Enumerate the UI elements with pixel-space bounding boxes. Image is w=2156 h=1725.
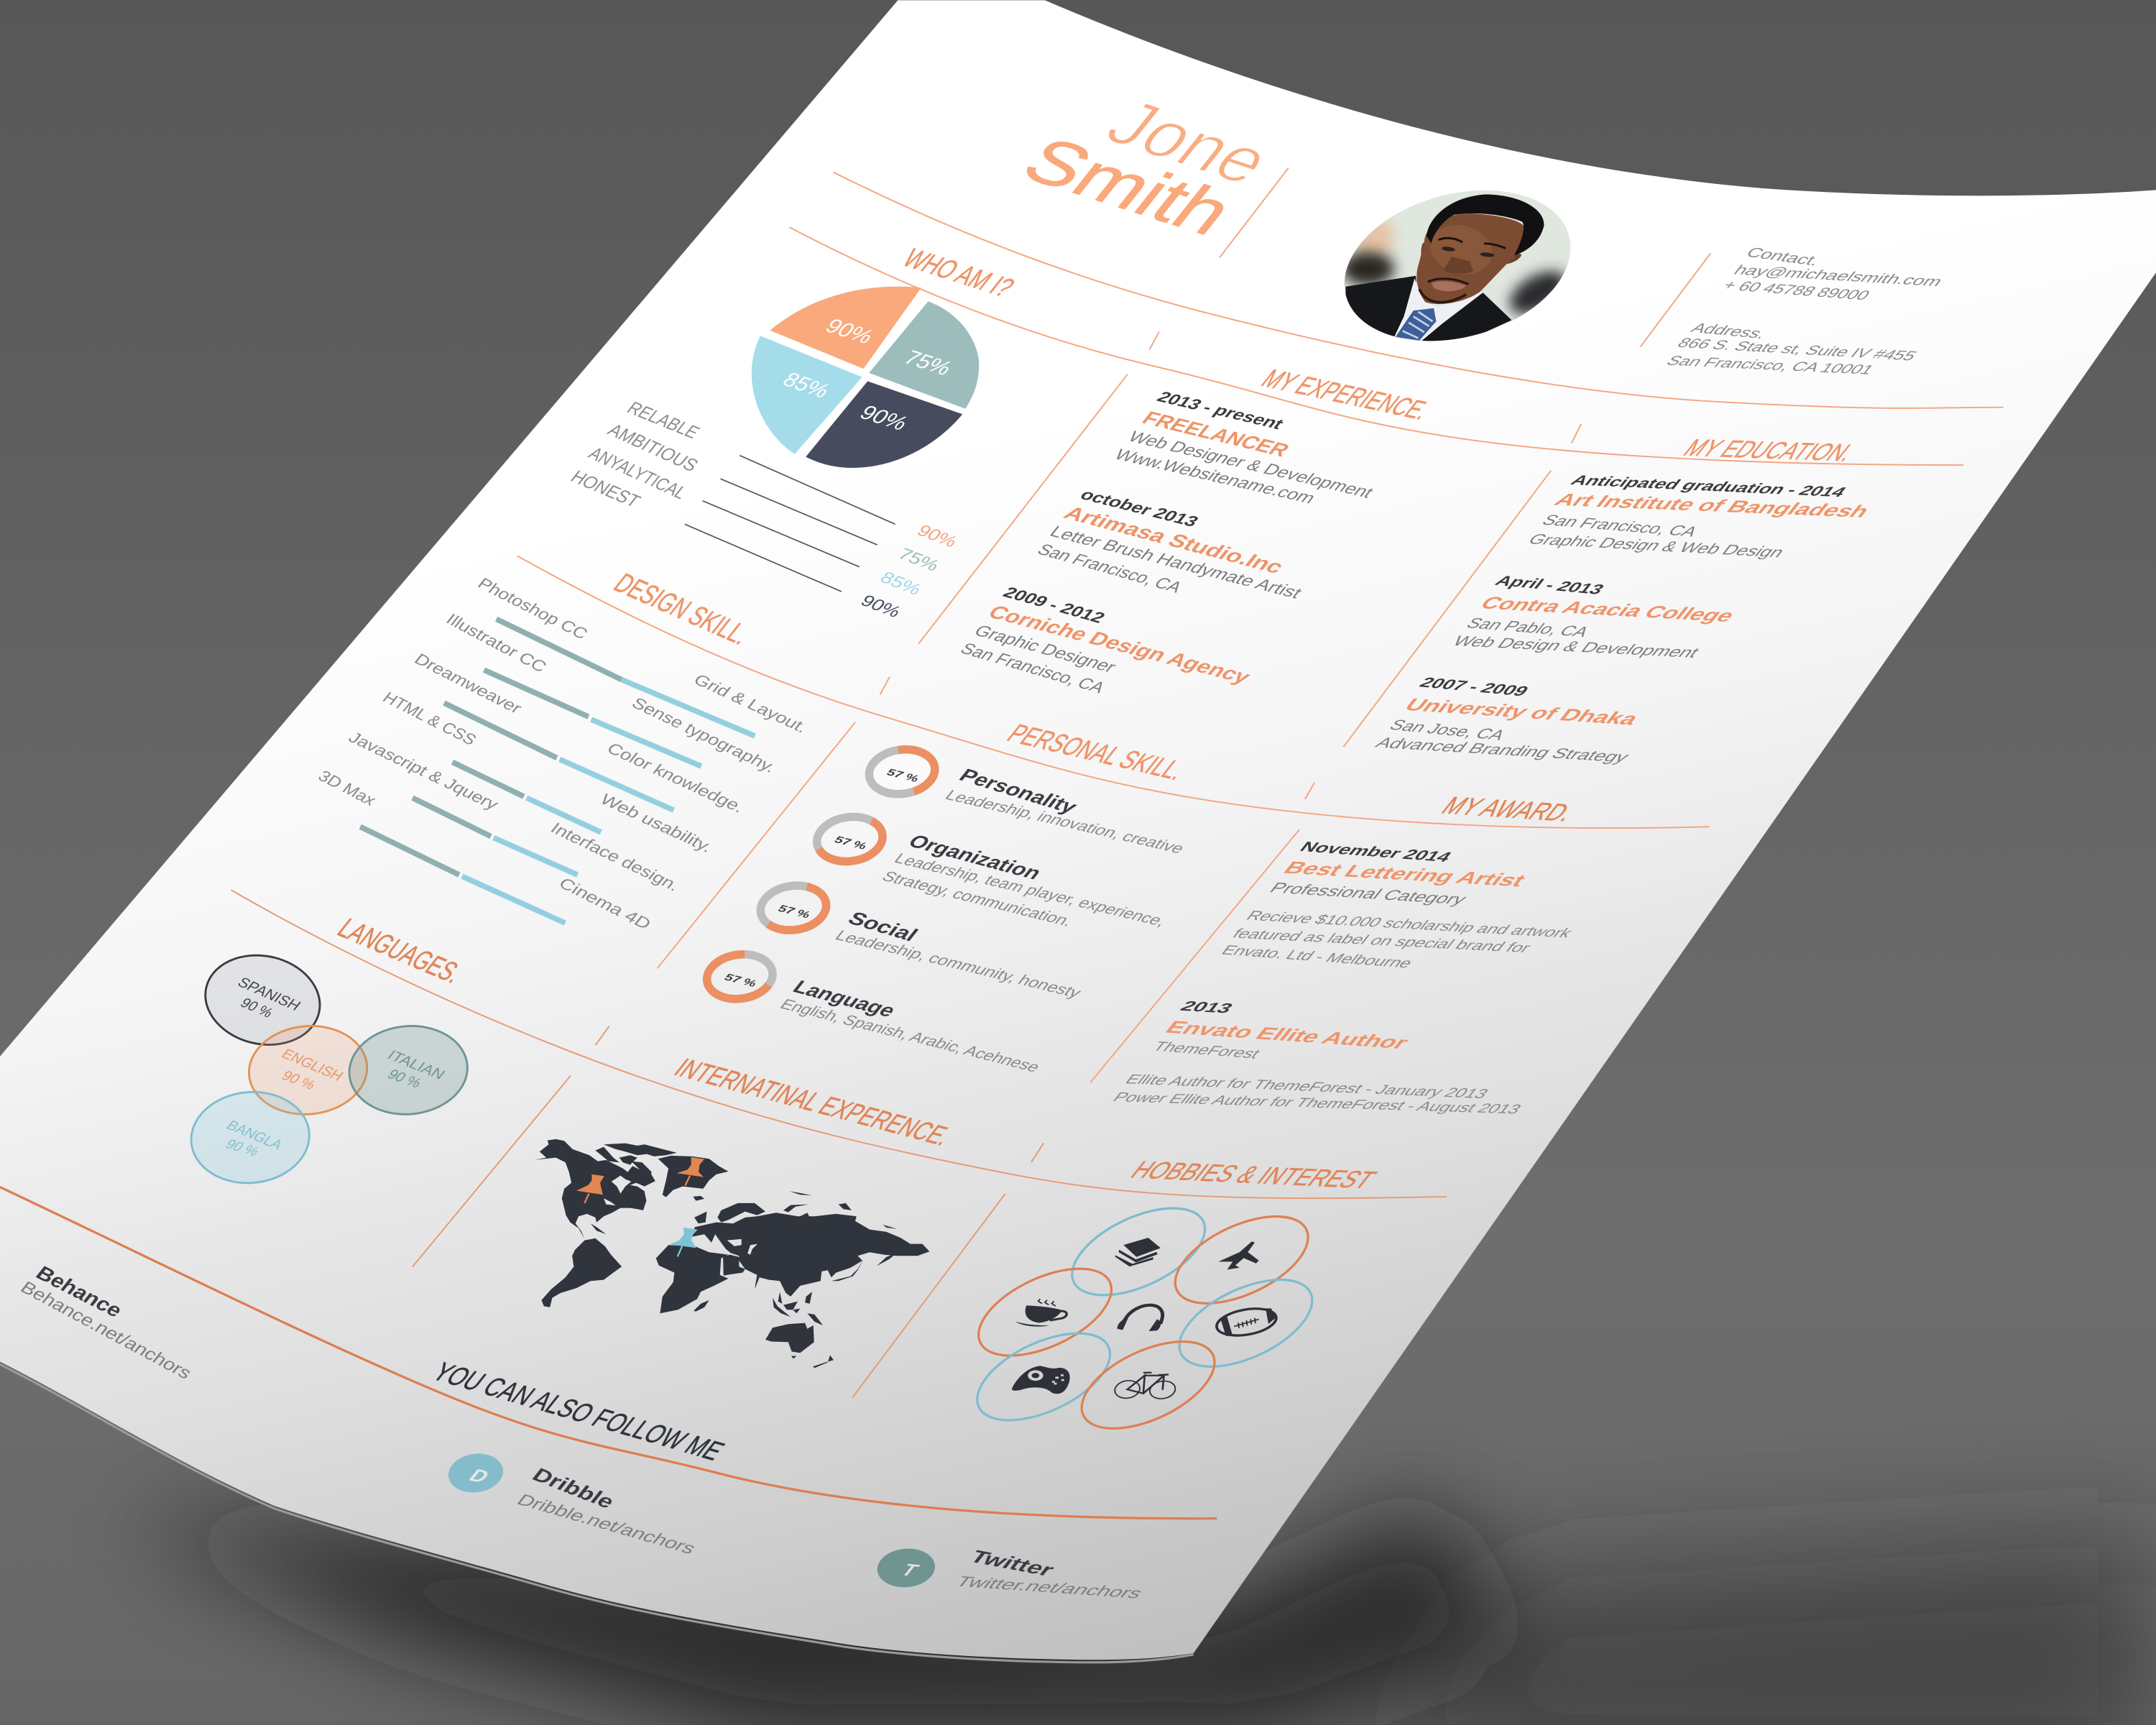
donut: social: 57 % <box>775 903 813 921</box>
panel: personal skill <box>704 719 1192 1075</box>
skill labels left: Dreamweaver <box>410 650 525 717</box>
award list: Professional Category <box>1266 880 1470 908</box>
heading: my experience: MY EXPERIENCE. <box>1255 365 1437 426</box>
behance link: Behance <box>32 1262 126 1322</box>
personal skill text: Organization <box>904 832 1046 883</box>
skill labels left: Javascript & Jquery <box>345 729 502 814</box>
trait list: AMBITIOUS <box>604 420 702 475</box>
trait list: HONEST <box>567 466 645 511</box>
bubble: english: 90 % <box>278 1067 319 1092</box>
panel: award <box>1110 791 1582 1116</box>
award list: Envato. Ltd - Melbourne <box>1218 942 1416 970</box>
personal skill text: Personality <box>954 765 1082 818</box>
school list: San Jose, CA <box>1386 717 1509 743</box>
skill labels right: Color knowledge. <box>603 740 748 816</box>
heading: design skill: DESIGN SKILL. <box>607 568 756 650</box>
heading: my award: MY AWARD. <box>1436 791 1582 827</box>
icon: t badge <box>875 1546 936 1590</box>
job list: october 2013 <box>1076 487 1202 530</box>
icon: airplane <box>1218 1241 1259 1269</box>
heading: my education: MY EDUCATION. <box>1677 434 1862 466</box>
job list: Www.Websitename.com <box>1110 446 1319 507</box>
paper shadow <box>124 1506 2156 1725</box>
heading: who am i: WHO AM I? <box>896 244 1021 303</box>
personal skill text: Language <box>788 978 900 1021</box>
bubble: english: ENGLISH <box>278 1046 347 1084</box>
job list: San Francisco, CA <box>1033 541 1186 597</box>
icon: gamepad <box>1012 1366 1070 1394</box>
trait list: 90% <box>857 592 905 621</box>
heading: personal skill: PERSONAL SKILL. <box>1000 719 1192 786</box>
contact details: Address. <box>1687 320 1771 341</box>
skill labels right: Interface design. <box>547 819 683 895</box>
pie chart: 85% <box>778 368 835 402</box>
icon: football <box>1214 1305 1279 1340</box>
icon: t badge: T <box>896 1561 923 1580</box>
pie chart: 90% <box>821 314 879 348</box>
school list: Art Institute of Bangladesh <box>1550 490 1874 521</box>
award list: Recieve $10.000 scholarship and artwork <box>1243 908 1577 940</box>
paper rim <box>0 1364 1194 1662</box>
heading: hobbies: HOBBIES & INTEREST <box>1125 1156 1382 1193</box>
job list: Web Designer & Development <box>1124 428 1377 502</box>
panel: international experience <box>534 1053 959 1368</box>
donut: organization <box>814 813 885 865</box>
dribbble link: Dribble <box>528 1465 619 1513</box>
icon: bicycle <box>1112 1373 1178 1401</box>
personal skill text: Leadership, team player, experience, <box>891 850 1171 929</box>
school list <box>1372 472 1874 765</box>
donut: social <box>757 881 829 934</box>
job list: 2013 - present <box>1153 389 1287 433</box>
bubble: italian: ITALIAN <box>384 1047 448 1082</box>
skill labels left: HTML & CSS <box>379 689 480 749</box>
personal skill text <box>777 765 1188 1075</box>
heading: international experience: INTERNATINAL EXPERENCE. <box>668 1053 959 1151</box>
skill labels right: Sense typography. <box>628 694 780 776</box>
world map <box>534 1139 929 1368</box>
bubble: bangla: 90 % <box>222 1137 262 1159</box>
award list: Power Ellite Author for ThemeForest - August 2013 <box>1110 1090 1525 1116</box>
school list: Graphic Design & Web Design <box>1524 532 1788 561</box>
contact details: hay@michaelsmith.com <box>1731 262 1947 289</box>
personal skill text: English, Spanish, Arabic, Acehnese <box>777 996 1044 1075</box>
job list: Letter Brush Handymate Artist <box>1046 523 1306 602</box>
behance link: Behance.net/anchors <box>17 1277 195 1383</box>
twitter link <box>875 1546 1146 1601</box>
school list: Contra Acacia College <box>1475 594 1739 626</box>
panel: follow me <box>17 1262 1146 1601</box>
job list: FREELANCER <box>1138 408 1294 461</box>
pie chart: 75% <box>899 346 957 380</box>
award list <box>1110 839 1577 1116</box>
donut: organization: 57 % <box>831 834 870 852</box>
bubble: italian <box>346 1021 471 1119</box>
donut: language: 57 % <box>722 972 760 989</box>
school list: April - 2013 <box>1491 573 1608 598</box>
contact details: 866 S. State st, Suite IV #455 <box>1674 335 1920 363</box>
skill labels right: Cinema 4D <box>555 875 655 933</box>
panel: languages <box>188 913 471 1188</box>
section curve lines <box>0 168 2004 1519</box>
award list: Best Lettering Artist <box>1279 858 1530 891</box>
bubble: spanish: SPANISH <box>234 974 304 1013</box>
icon: books <box>1115 1238 1161 1266</box>
award list: featured as label on special brand for <box>1229 926 1535 955</box>
twitter link: Twitter.net/anchors <box>952 1574 1146 1601</box>
contact details: + 60 45788 89000 <box>1719 277 1874 303</box>
school list: University of Dhaka <box>1400 695 1644 729</box>
pin: north america <box>576 1174 604 1203</box>
award list: ThemeForest <box>1149 1039 1265 1062</box>
title: name: Jone <box>1092 87 1286 198</box>
skill labels right: Grid & Layout. <box>690 671 811 737</box>
personal skill text: Social <box>843 908 922 945</box>
pie chart: 90% <box>855 401 913 434</box>
skill labels left: Photoshop CC <box>474 575 591 643</box>
personal skill text: Leadership, community, honesty <box>831 927 1085 1000</box>
pin: europe <box>669 1228 698 1256</box>
panel: who am i <box>567 244 1021 621</box>
personal skill text: Leadership, innovation, creative <box>941 787 1188 856</box>
donut: personality <box>866 745 938 798</box>
award list: Envato Ellite Author <box>1161 1018 1414 1053</box>
bubble: italian: 90 % <box>384 1066 425 1090</box>
school list: Anticipated graduation - 2014 <box>1567 472 1851 500</box>
bubble: bangla <box>188 1087 313 1188</box>
job list: Graphic Designer <box>970 622 1120 676</box>
skill labels left <box>315 575 591 814</box>
school list: 2007 - 2009 <box>1416 675 1532 699</box>
job list: San Francisco, CA <box>957 640 1109 696</box>
award list: November 2014 <box>1296 839 1456 865</box>
skill labels left: 3D Max <box>315 768 379 809</box>
bubble: spanish <box>197 945 328 1055</box>
contact details: Contact. <box>1743 244 1824 269</box>
school list: Web Design & Development <box>1449 633 1703 661</box>
school list: San Pablo, CA <box>1462 615 1593 640</box>
job list: Corniche Design Agency <box>983 602 1256 688</box>
personal skill text: Strategy, communication. <box>878 868 1077 929</box>
trait list: ANYALYTICAL <box>584 443 691 502</box>
job list <box>957 389 1377 696</box>
panel: design skill <box>315 568 811 933</box>
skill labels right: Web usability. <box>596 791 717 856</box>
bubble: spanish: 90 % <box>237 995 277 1021</box>
heading: you can also follow me: YOU CAN ALSO FOLLOW ME <box>426 1357 730 1466</box>
pin: greenland <box>677 1157 704 1186</box>
trait list: 75% <box>894 546 943 575</box>
skill bars <box>360 619 755 923</box>
trait list: 90% <box>913 522 961 551</box>
dribbble link <box>446 1450 700 1558</box>
icon: headphones <box>1118 1305 1163 1331</box>
trait list: RELABLE <box>623 398 704 442</box>
title: name <box>1008 87 1286 248</box>
pie chart <box>752 287 979 468</box>
skill labels left: Illustrator CC <box>442 611 550 676</box>
panel: experience <box>957 365 1437 696</box>
hobby icons <box>1012 1238 1279 1401</box>
heading: languages: LANGUAGES. <box>331 913 469 989</box>
icon: d badge <box>446 1450 506 1496</box>
title: name: Smith <box>1008 124 1248 248</box>
trait list <box>567 398 961 621</box>
panel: hobbies and interest <box>964 1156 1382 1446</box>
hobby rings <box>964 1190 1325 1446</box>
twitter link: Twitter <box>965 1547 1059 1580</box>
skill labels right <box>547 671 811 933</box>
portrait photo <box>1344 190 1571 341</box>
panel: education <box>1372 434 1874 765</box>
job list: Artimasa Studio.Inc <box>1059 503 1288 578</box>
award list: Ellite Author for ThemeForest - January 2013 <box>1122 1072 1492 1101</box>
trait list: 85% <box>876 569 925 599</box>
donut: language <box>704 950 775 1003</box>
job list: 2009 - 2012 <box>999 584 1108 627</box>
school list: San Francisco, CA <box>1538 512 1702 540</box>
bubble: english <box>245 1021 371 1119</box>
icon: coffee cup <box>1015 1299 1067 1327</box>
school list: Advanced Branding Strategy <box>1372 735 1633 765</box>
award list: 2013 <box>1176 998 1237 1016</box>
bubble: bangla: BANGLA <box>224 1117 287 1153</box>
contact details: San Francisco, CA 10001 <box>1663 353 1878 377</box>
donut: personality: 57 % <box>884 768 921 784</box>
contact details <box>1663 244 1947 377</box>
dribbble link: Dribble.net/anchors <box>513 1491 700 1558</box>
icon: d badge: D <box>464 1466 494 1487</box>
